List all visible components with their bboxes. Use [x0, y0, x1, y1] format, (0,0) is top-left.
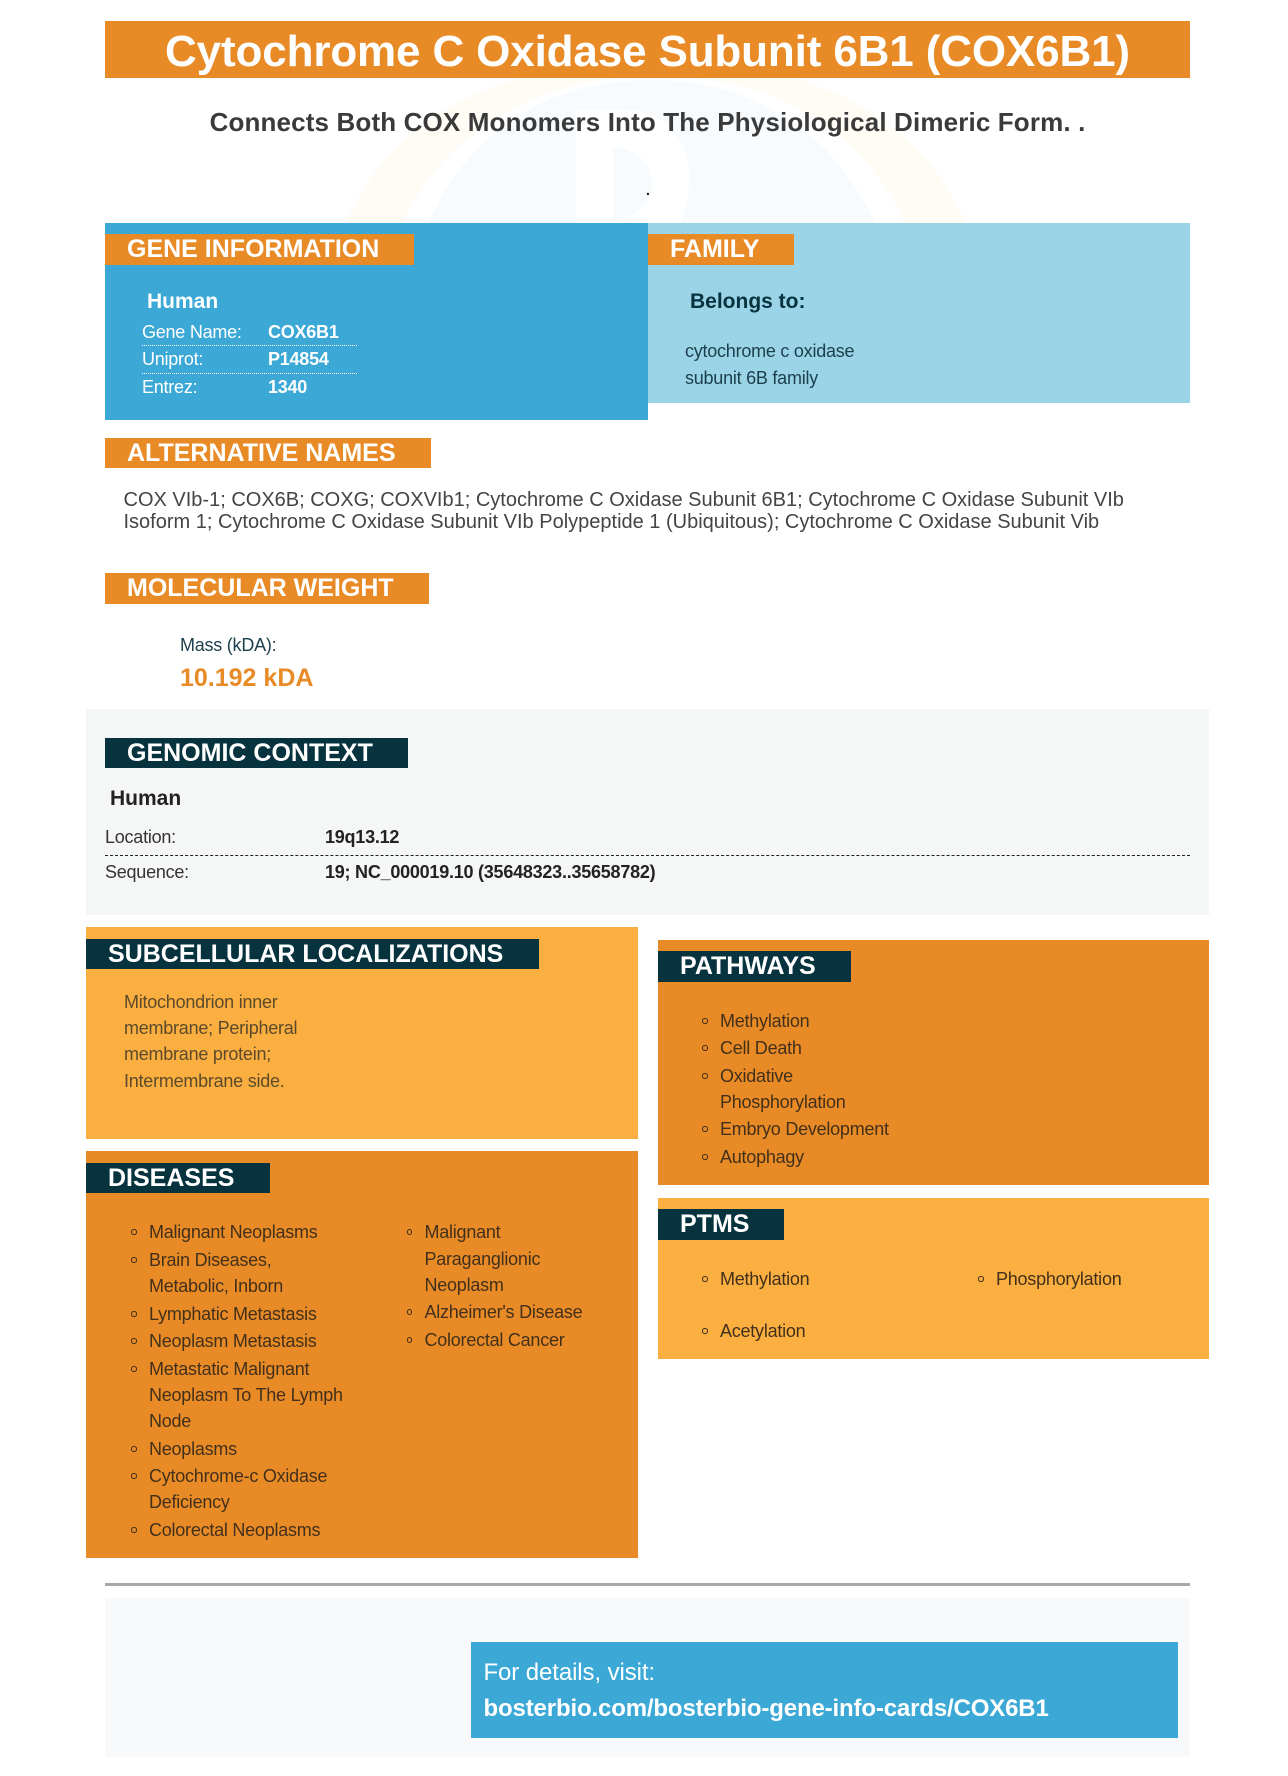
- disease list column 1: Neoplasm Metastasis: [149, 1331, 317, 1351]
- family text: subunit 6B family: [685, 368, 818, 388]
- logo watermark: [346, 78, 966, 223]
- belongs to label: Belongs to:: [690, 290, 806, 313]
- entrez row: Entrez:: [142, 377, 197, 397]
- location row: Location:: [105, 827, 176, 847]
- title banner: Cytochrome C Oxidase Subunit 6B1 (COX6B1): [165, 27, 1130, 76]
- disease list column 1: Deficiency: [149, 1492, 230, 1512]
- panel: pathways: [658, 940, 1209, 1185]
- disease list column 2: Alzheimer's Disease: [424, 1302, 582, 1322]
- uniprot row: [142, 346, 357, 374]
- location row: [105, 824, 1190, 856]
- alternative names text: Isoform 1; Cytochrome C Oxidase Subunit VIb Polypeptide 1 (Ubiquitous); Cytochrome C Oxidase Subunit Vib: [124, 511, 1099, 533]
- family text: [685, 341, 854, 388]
- panel: genomic context: [86, 709, 1209, 915]
- ptm item: phosphorylation: Phosphorylation: [996, 1269, 1122, 1289]
- location row: 19q13.12: [325, 827, 399, 847]
- panel: ptms: [658, 1198, 1209, 1359]
- heading: ptms: [658, 1209, 784, 1240]
- heading: diseases: [86, 1163, 270, 1193]
- heading: alternative names: ALTERNATIVE NAMES: [127, 439, 396, 467]
- pathway list: [702, 1011, 889, 1167]
- species label: Human: [110, 787, 181, 810]
- heading: pathways: PATHWAYS: [680, 952, 816, 980]
- ptm item: acetylation: Acetylation: [720, 1321, 805, 1341]
- localization text: Intermembrane side.: [124, 1071, 285, 1091]
- heading: pathways: [658, 951, 851, 982]
- gene name row: COX6B1: [268, 322, 339, 342]
- localization text: Mitochondrion inner: [124, 992, 278, 1012]
- disease list column 2: Colorectal Cancer: [424, 1330, 564, 1350]
- heading: family: FAMILY: [670, 235, 759, 263]
- heading: subcellular localizations: SUBCELLULAR LOCALIZATIONS: [108, 940, 503, 968]
- disease list column 2: [407, 1222, 582, 1350]
- callout label: For details, visit:: [484, 1659, 655, 1686]
- pathway list: Embryo Development: [720, 1119, 889, 1139]
- panel: family: [648, 223, 1190, 403]
- disease list column 2: Malignant: [424, 1222, 500, 1242]
- disease list column 1: Node: [149, 1411, 191, 1431]
- heading: molecular weight: MOLECULAR WEIGHT: [127, 574, 394, 602]
- pathway list: Cell Death: [720, 1038, 802, 1058]
- panel: footer: [105, 1598, 1190, 1757]
- gene name row: [142, 318, 357, 346]
- sequence row: Sequence:: [105, 862, 189, 882]
- pathway list: Autophagy: [720, 1147, 804, 1167]
- disease list column 1: Neoplasm To The Lymph: [149, 1385, 343, 1405]
- disease list column 1: [131, 1222, 343, 1540]
- footer divider: [105, 1583, 1190, 1586]
- uniprot row: P14854: [268, 349, 329, 369]
- disease list column 1: Malignant Neoplasms: [149, 1222, 318, 1242]
- heading: family: [648, 234, 794, 265]
- heading: genomic context: GENOMIC CONTEXT: [127, 739, 373, 767]
- disease list column 2: Paraganglionic: [424, 1248, 540, 1268]
- ptm item: methylation: Methylation: [720, 1269, 809, 1289]
- callout: details link: [471, 1642, 1178, 1738]
- entrez row: [142, 377, 307, 397]
- disease list column 1: Metastatic Malignant: [149, 1359, 309, 1379]
- disease list column 1: Colorectal Neoplasms: [149, 1520, 320, 1540]
- disease list column 1: Neoplasms: [149, 1439, 237, 1459]
- gene name row: Gene Name:: [142, 322, 242, 342]
- family text: cytochrome c oxidase: [685, 341, 854, 361]
- localization text: [124, 992, 297, 1091]
- pathway list: Phosphorylation: [720, 1092, 846, 1112]
- entrez row: 1340: [268, 377, 307, 397]
- localization text: membrane protein;: [124, 1044, 271, 1064]
- alternative names text: [124, 489, 1124, 533]
- alternative names text: COX VIb-1; COX6B; COXG; COXVIb1; Cytochrome C Oxidase Subunit 6B1; Cytochrome C Oxidase Subunit VIb: [124, 489, 1124, 511]
- panel: subcellular localizations: [86, 927, 638, 1139]
- callout url: bosterbio.com/bosterbio-gene-info-cards/COX6B1: [484, 1695, 1049, 1722]
- mass label: Mass (kDA):: [180, 635, 276, 655]
- panel: diseases: [86, 1151, 638, 1558]
- panel: gene information: [105, 223, 648, 420]
- disease list column 1: Cytochrome-c Oxidase: [149, 1466, 327, 1486]
- mass value: 10.192 kDA: [180, 664, 313, 692]
- uniprot row: Uniprot:: [142, 349, 203, 369]
- heading: gene information: GENE INFORMATION: [127, 235, 379, 263]
- subtitle: Connects Both COX Monomers Into The Physiological Dimeric Form. .: [210, 107, 1085, 137]
- sequence row: [105, 862, 655, 882]
- disease list column 1: Lymphatic Metastasis: [149, 1304, 317, 1324]
- pathway list: Methylation: [720, 1011, 809, 1031]
- disease list column 2: Neoplasm: [424, 1275, 504, 1295]
- heading: ptms: PTMS: [680, 1210, 749, 1238]
- disease list column 1: Brain Diseases,: [149, 1250, 271, 1270]
- species label: Human: [147, 290, 218, 313]
- disease list column 1: Metabolic, Inborn: [149, 1276, 283, 1296]
- sequence row: 19; NC_000019.10 (35648323..35658782): [325, 862, 655, 882]
- localization text: membrane; Peripheral: [124, 1018, 297, 1038]
- pathway list: Oxidative: [720, 1066, 793, 1086]
- stray period: .: [646, 182, 650, 198]
- heading: diseases: DISEASES: [108, 1164, 234, 1192]
